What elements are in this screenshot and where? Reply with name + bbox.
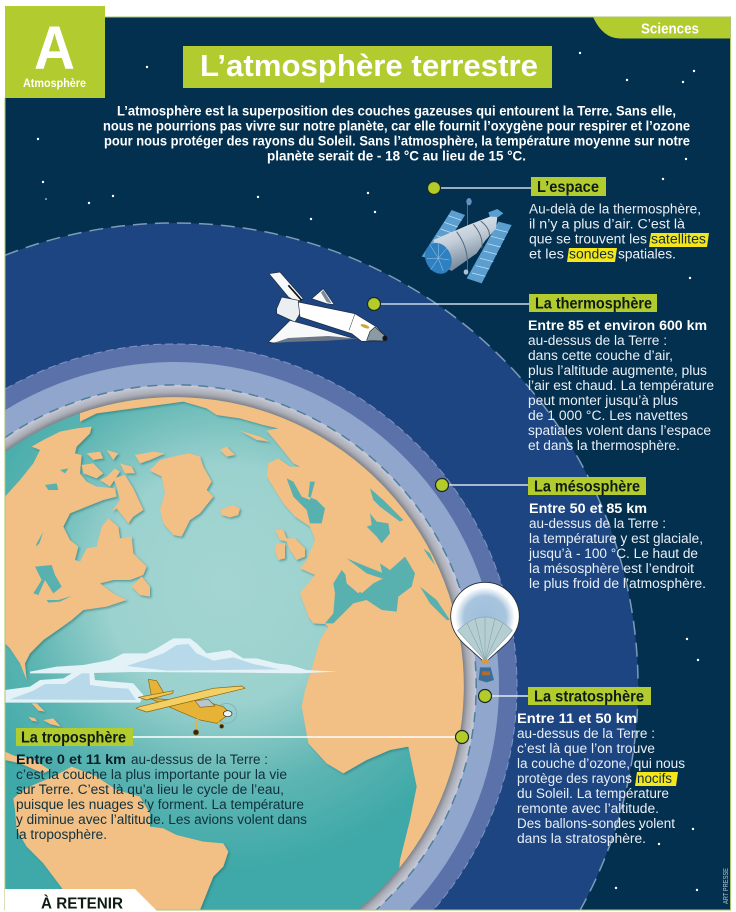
text: stratosphère: du Soleil. La température [517,786,669,801]
heading: troposphère: La troposphère [21,730,126,746]
text: stratosphère: protège des rayons [517,771,632,786]
text: stratosphère: remonte avec l’altitude. [517,801,659,816]
text: thermosphère: de 1 000 °C. Les navettes [528,408,688,423]
letter tab: A [34,14,75,82]
text: stratosphère: c’est là que l’on trouve [517,741,655,756]
Siberian lake [370,488,403,522]
letter tab [5,6,105,98]
text: espace: Au-delà de la thermosphère, [529,202,701,216]
text: mésosphère: la mésosphère est l’endroit [529,561,694,576]
text: stratosphère: nocifs [637,771,672,786]
text: espace: et les [529,246,564,262]
title: L’atmosphère terrestre [200,48,538,83]
atmosphere layers and Earth [5,223,638,910]
text: espace: spatiales. [618,246,676,262]
Iceland [220,505,240,517]
credit: ART PRESSE [723,868,730,904]
text: stratosphère: Des ballons-sondes volent [517,816,675,831]
Newfoundland [132,577,150,597]
South America [13,767,228,910]
Caspian [367,513,390,543]
North America [5,427,147,680]
category tab: Sciences [641,20,699,38]
text: stratosphère: dans la stratosphère. [517,831,646,846]
panel: troposphère [16,728,468,842]
text: thermosphère: peut monter jusqu’à plus [528,393,678,408]
Baltic [287,478,325,523]
heading: thermosphère: La thermosphère [535,296,652,312]
text: troposphère [16,752,307,842]
À retenir tab: À RETENIR [41,894,123,912]
category tab [593,17,730,38]
Novaya Zemlya [240,431,270,442]
text: mésosphère: Entre 50 et 85 km [529,501,647,516]
connector: troposphère [132,730,468,744]
text: espace: sondes [569,246,614,262]
text: thermosphère [528,318,714,453]
text: thermosphère: au-dessus de la Terre : [528,333,667,348]
layer: troposphere [5,385,476,910]
text: mésosphère: la température y est glaciale, [529,531,703,546]
text: troposphère: sur Terre. C’est là qu’a lieu le cycle de l’eau, [16,782,284,797]
text: thermosphère: dans cette couche d’air, [528,348,673,363]
Italy [345,574,360,594]
text: stratosphère: au-dessus de la Terre : [517,726,655,741]
text: mésosphère [528,501,706,591]
connector: thermosphère [368,298,530,310]
text: thermosphère: plus l’altitude augmente, plus [528,363,707,378]
panel: mésosphère [436,477,706,591]
text: troposphère: Entre 0 et 11 km [16,752,126,767]
Great Britain [275,530,305,560]
Svalbard [220,447,235,457]
layer: mesosphere [5,344,517,910]
Black Sea arm [347,558,384,578]
layer: stratosphere [5,362,499,910]
Arctic islands [82,450,165,523]
text: espace: satellites [651,232,706,246]
text: stratosphère: la couche d’ozone, qui nous [517,756,685,771]
intro text [103,102,690,164]
text: espace: il n’y a plus d’air. C’est là [529,216,686,232]
text: troposphère: y diminue avec l’altitude. Les avions volent dans [16,812,307,827]
connector: stratosphère [478,690,529,702]
text: espace: que se trouvent les [529,232,647,246]
intro text: pour nous protéger des rayons du Soleil. Sans l’atmosphère, la température moyenne sur notre [104,132,690,148]
letter tab: Atmosphère [23,76,86,90]
intro text: nous ne pourrions pas vivre sur notre planète, car elle fournit l’oxygène pour respirer et l’ozone [103,118,690,134]
text: thermosphère: spatiales volent dans l’espace [528,423,711,438]
intro text: L’atmosphère est la superposition des couches gazeuses qui entourent la Terre. Sans elle, [117,102,676,118]
text: thermosphère: et dans la thermosphère. [528,438,680,453]
inland seas [33,468,450,623]
panel: espace [428,177,709,262]
text: espace [529,202,709,262]
text: mésosphère: au-dessus de la Terre : [529,516,666,531]
text: mésosphère: le plus froid de l’atmosphère. [529,576,706,591]
heading: stratosphère: La stratosphère [534,688,644,706]
layer: thermosphere [5,223,638,910]
Ireland [275,543,285,560]
Persian Gulf [423,548,435,565]
text: troposphère: c’est la couche la plus importante pour la vie [16,767,287,782]
text: troposphère: au-dessus de la Terre : [131,752,268,767]
text: mésosphère: jusqu’à - 100 °C. Le haut de [528,546,698,561]
text: troposphère: puisque les nuages s’y forment. La température [16,797,304,812]
Earth continents [6,397,464,910]
weather balloon [451,582,519,682]
text: stratosphère [517,711,685,846]
text: thermosphère: l’air est chaud. La température [528,378,714,393]
Mediterranean [325,557,415,623]
clouds [5,638,337,703]
Eurasia and Africa [80,397,464,868]
heading: mésosphère: La mésosphère [534,478,640,496]
panel: thermosphère [368,294,714,453]
Caribbean islands [28,703,61,727]
À retenir tab [5,889,158,912]
Central America [5,752,50,773]
Earth ocean [5,397,464,910]
heading: espace: L’espace [537,179,599,196]
airplane [136,679,245,735]
text: stratosphère: Entre 11 et 50 km [517,711,637,726]
space shuttle [268,272,387,343]
Hubble satellite [420,198,512,283]
text: troposphère: la troposphère. [16,827,107,842]
Great Lakes [33,468,72,603]
connector: espace [428,182,532,194]
intro text: planète serait de - 18 °C au lieu de 15 °C. [267,148,526,164]
connector: mésosphère [436,478,529,492]
panel: stratosphère [478,687,685,846]
Red Sea [420,587,450,620]
Greenland [150,453,213,537]
text: thermosphère: Entre 85 et environ 600 km [528,318,707,333]
